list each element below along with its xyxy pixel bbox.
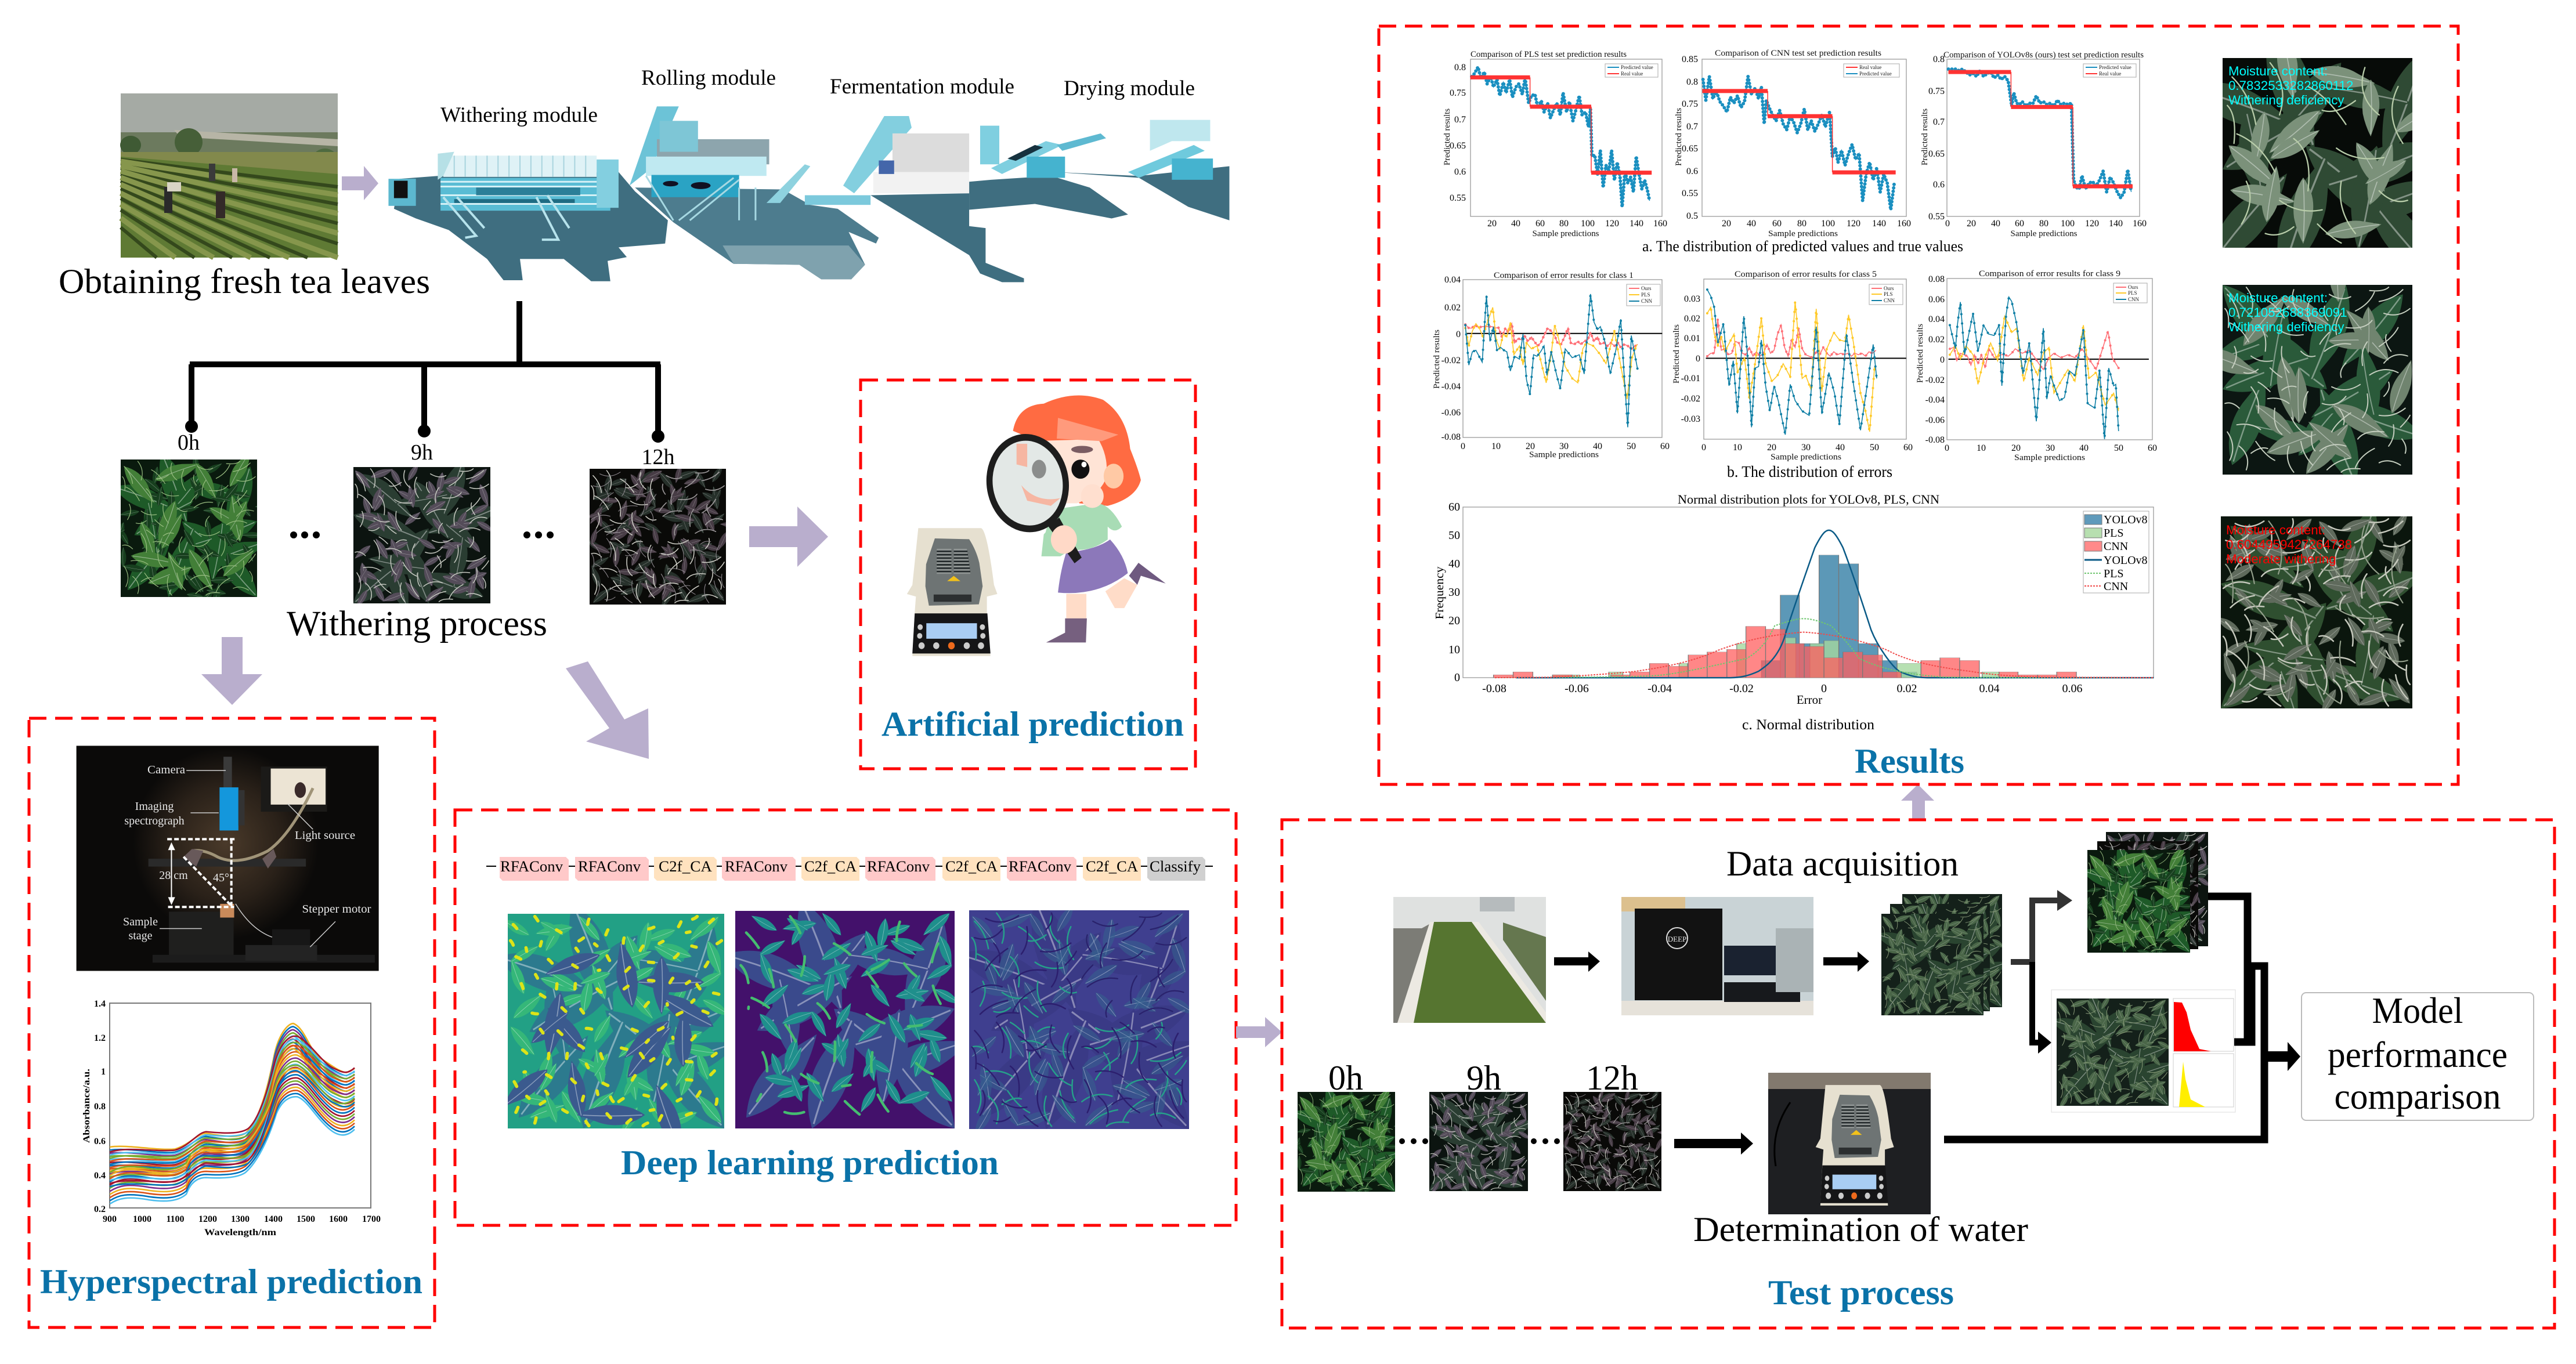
chart: normal distribution histogram: PLS xyxy=(2104,567,2123,580)
caption: withering process: Withering process xyxy=(287,605,547,643)
arrow xyxy=(1554,951,1600,972)
chart: errors class 1: 0.04 xyxy=(1444,275,1461,285)
chart: errors class 9: 0.08 xyxy=(1928,274,1945,284)
chart: errors class 1: CNN xyxy=(1641,298,1653,304)
chart: YOLOv8s predictions: Real value xyxy=(2099,71,2121,77)
chart: YOLOv8s predictions: 0.6 xyxy=(1933,180,1945,190)
chart: normal distribution histogram: 60 xyxy=(1448,501,1460,513)
caption: obtaining fresh tea leaves: Obtaining fresh tea leaves xyxy=(59,262,430,301)
chart: PLS predictions: 20 xyxy=(1487,219,1497,229)
arrow: to model comparison xyxy=(2264,1042,2300,1071)
chart: normal distribution histogram: -0.02 xyxy=(1729,682,1754,695)
chart: normal distribution histogram: Frequency xyxy=(1433,566,1446,620)
chart: normal distribution histogram: 40 xyxy=(1448,558,1460,570)
network block chain: RFAConv xyxy=(867,858,930,875)
chart: absorbance spectra: Absorbance/a.u. xyxy=(82,1069,92,1143)
chart: normal distribution histogram: 10 xyxy=(1448,643,1460,656)
chart: errors class 9: 50 xyxy=(2114,443,2123,453)
caption c: c. Normal distribution xyxy=(1742,717,1875,733)
chart: absorbance spectra: 0.2 xyxy=(94,1204,106,1214)
chart: errors class 1: 30 xyxy=(1559,442,1569,451)
image: 12h xyxy=(1547,1068,1680,1203)
chart: CNN predictions: 60 xyxy=(1772,219,1782,229)
label: 12h: 12h xyxy=(1586,1059,1638,1097)
chart: PLS predictions: 0.65 xyxy=(1450,141,1466,151)
chart: absorbance spectra: 1300 xyxy=(231,1214,250,1224)
image stack: raw leaves xyxy=(1874,885,2011,1021)
panel: artificial prediction xyxy=(861,380,1195,769)
chart: errors class 9: 40 xyxy=(2079,443,2089,453)
chart: errors class 9: PLS xyxy=(2128,290,2137,296)
chart: YOLOv8s predictions: Predicted value xyxy=(2099,64,2131,70)
chart: absorbance spectra: 1000 xyxy=(133,1214,151,1224)
chart: PLS predictions: 0.6 xyxy=(1454,167,1466,177)
chart: absorbance spectra: 0.4 xyxy=(94,1171,106,1181)
arrow head: gray xyxy=(2057,890,2072,911)
chart: CNN predictions: 160 xyxy=(1897,219,1911,229)
connectors to model comparison xyxy=(1944,896,2264,1139)
arrow: test process to results xyxy=(1901,784,1934,820)
result image 1: Moisture content: xyxy=(2228,64,2328,78)
chart: absorbance spectra: 1600 xyxy=(329,1214,348,1224)
chart: absorbance spectra: 0.6 xyxy=(94,1137,106,1146)
chart: PLS predictions: Sample predictions xyxy=(1532,229,1599,238)
chart: CNN predictions: 0.55 xyxy=(1682,189,1698,198)
panel: hyperspectral prediction xyxy=(29,718,435,1327)
chart: errors class 1: Predicted results xyxy=(1432,330,1441,389)
chart: CNN predictions: 0.75 xyxy=(1682,99,1698,109)
feature map 2 xyxy=(719,894,976,1139)
photo: hyperspectral imaging system: Imaging xyxy=(135,800,174,813)
chart: YOLOv8s predictions: 0 xyxy=(1945,219,1950,229)
chart: errors class 5: Ours xyxy=(1884,285,1894,291)
chart: errors class 1: Comparison of error results for class 1 xyxy=(1494,271,1634,280)
chart: CNN predictions: 0.65 xyxy=(1682,144,1698,154)
chart: errors class 1: -0.06 xyxy=(1441,408,1461,418)
chart: CNN predictions: 0.5 xyxy=(1686,211,1698,221)
chart: CNN predictions: 0.6 xyxy=(1686,167,1698,176)
title: hyperspectral prediction: Hyperspectral prediction xyxy=(40,1262,422,1301)
result image 2: Withering deficiency xyxy=(2228,320,2344,334)
chart: errors class 9: 0.06 xyxy=(1928,295,1945,305)
chart: normal distribution histogram: Normal distribution plots for YOLOv8, PLS, CNN xyxy=(1678,492,1939,506)
chart: CNN predictions: 0.85 xyxy=(1682,55,1698,64)
chart: absorbance spectra: 900 xyxy=(103,1214,117,1224)
chart: CNN predictions: Comparison of CNN test set prediction results xyxy=(1715,49,1881,58)
chart: YOLOv8s predictions: 100 xyxy=(2061,219,2075,229)
arrow: deep learning to test process xyxy=(1236,1017,1282,1047)
image: 9h leaves xyxy=(347,457,501,616)
result image 2 xyxy=(2178,236,2447,507)
icon: girl with magnifying glass xyxy=(980,396,1166,642)
chart: YOLOv8s predictions: 20 xyxy=(1967,219,1976,229)
chart: errors class 1: -0.08 xyxy=(1441,432,1461,442)
chart: PLS predictions xyxy=(1443,50,1667,238)
chart: absorbance spectra xyxy=(82,999,381,1238)
chart: absorbance spectra: 1400 xyxy=(264,1214,283,1224)
chart: YOLOv8s predictions: 0.8 xyxy=(1933,55,1945,64)
chart: YOLOv8s predictions: Predicted results xyxy=(1920,108,1930,165)
chart: errors class 5: 30 xyxy=(1801,443,1811,453)
chart: errors class 5: 20 xyxy=(1767,443,1776,453)
chart: errors class 1: 0 xyxy=(1461,442,1465,451)
chart: YOLOv8s predictions: 60 xyxy=(2015,219,2024,229)
chart: errors class 9: Predicted results xyxy=(1916,324,1925,383)
network block chain: RFAConv xyxy=(725,858,787,875)
panel: deep learning prediction xyxy=(455,810,1236,1225)
chart: errors class 9: -0.02 xyxy=(1925,375,1945,385)
chart: PLS predictions: 160 xyxy=(1653,219,1667,229)
box: model performance comparison: comparison xyxy=(2334,1076,2501,1117)
chart: errors class 1 xyxy=(1432,271,1670,460)
chart: errors class 5: 40 xyxy=(1836,443,1845,453)
chart: errors class 9: 0.02 xyxy=(1928,335,1945,345)
network block chain: RFAConv xyxy=(500,858,563,875)
chart: YOLOv8s predictions: Comparison of YOLOv8s (ours) test set prediction results xyxy=(1943,50,2144,60)
chart: errors class 5: CNN xyxy=(1884,298,1895,303)
photo: hyperspectral imaging system: Sample xyxy=(123,916,158,928)
arrow xyxy=(1823,951,1869,972)
chart: CNN predictions: Predicted results xyxy=(1674,108,1683,166)
result image 1 xyxy=(2181,8,2459,288)
result image 2: Moisture content: xyxy=(2228,291,2328,305)
chart: errors class 9: -0.08 xyxy=(1925,435,1945,445)
factory production line xyxy=(388,106,1229,282)
chart: normal distribution histogram: 0.04 xyxy=(1979,682,2000,695)
chart: errors class 1: 20 xyxy=(1526,442,1535,451)
chart: errors class 5: 60 xyxy=(1903,443,1913,453)
chart: errors class 9: Ours xyxy=(2128,284,2138,290)
chart: errors class 1: 60 xyxy=(1660,442,1670,451)
chart: YOLOv8s predictions: 40 xyxy=(1991,219,2000,229)
chart: PLS predictions: 140 xyxy=(1630,219,1643,229)
chart: errors class 9: -0.04 xyxy=(1925,395,1945,405)
chart: CNN predictions: 120 xyxy=(1847,219,1860,229)
arrow head: black xyxy=(2038,1032,2051,1054)
network block chain: C2f_CA xyxy=(804,858,857,875)
image: 12h leaves xyxy=(567,436,752,621)
chart: YOLOv8s predictions: 160 xyxy=(2133,219,2147,229)
chart: normal distribution histogram: CNN xyxy=(2104,540,2128,553)
photo: hyperspectral imaging system: Light source xyxy=(295,829,355,842)
chart: errors class 1: -0.02 xyxy=(1441,356,1461,366)
network block chain xyxy=(486,857,1213,881)
title: deep learning prediction: Deep learning prediction xyxy=(621,1144,999,1182)
caption a: a. The distribution of predicted values and true values xyxy=(1642,238,1963,255)
label: fermentation module: Fermentation module xyxy=(830,75,1014,99)
box: model performance comparison: performance xyxy=(2328,1034,2508,1075)
chart: CNN predictions: 40 xyxy=(1747,219,1756,229)
chart: errors class 1: 40 xyxy=(1593,442,1602,451)
ellipsis dots xyxy=(290,531,554,538)
photo: imaging setup with laptop xyxy=(1621,897,1813,1015)
chart: errors class 9: 10 xyxy=(1977,443,1986,453)
chart: errors class 9: 20 xyxy=(2011,443,2021,453)
chart: errors class 9: -0.06 xyxy=(1925,415,1945,425)
chart: CNN predictions: 20 xyxy=(1722,219,1731,229)
network block chain: Classify xyxy=(1150,858,1201,875)
photo: hyperspectral imaging system: Stepper motor xyxy=(302,903,371,916)
chart: errors class 5: 0.01 xyxy=(1684,334,1700,343)
chart: normal distribution histogram: PLS xyxy=(2104,527,2123,540)
chart: normal distribution histogram: 0 xyxy=(1821,682,1827,695)
chart: PLS predictions: 40 xyxy=(1511,219,1520,229)
chart: normal distribution histogram: 0 xyxy=(1454,671,1460,684)
connector: raw to histogram xyxy=(2032,962,2043,1043)
chart: errors class 9: 0 xyxy=(1940,355,1945,365)
image stack: processed leaves xyxy=(2066,816,2217,977)
chart: normal distribution histogram: 50 xyxy=(1448,529,1460,542)
chart: normal distribution histogram: 0.06 xyxy=(2062,682,2082,695)
chart: errors class 5: Predicted results xyxy=(1672,324,1681,383)
chart: normal distribution histogram: 30 xyxy=(1448,586,1460,599)
label: 12h: 12h xyxy=(642,445,674,469)
network block chain: C2f_CA xyxy=(945,858,998,875)
chart: errors class 5: Comparison of error results for class 5 xyxy=(1735,270,1877,279)
result image 3: Moderate withering xyxy=(2226,552,2336,566)
chart: errors class 5: 0.02 xyxy=(1684,314,1700,324)
chart: normal distribution histogram: 20 xyxy=(1448,614,1460,627)
heading: data acquisition: Data acquisition xyxy=(1726,845,1959,884)
chart: errors class 5: -0.01 xyxy=(1681,374,1700,383)
chart: YOLOv8s predictions: 80 xyxy=(2039,219,2048,229)
arrow: field to factory xyxy=(342,166,378,200)
chart: errors class 9: Sample predictions xyxy=(2014,453,2085,462)
chart: normal distribution histogram: -0.04 xyxy=(1648,682,1672,695)
chart: errors class 5: PLS xyxy=(1884,291,1893,297)
result image 1: Withering deficiency xyxy=(2228,93,2344,107)
photo: hyperspectral imaging system: stage xyxy=(128,929,153,942)
network block chain: C2f_CA xyxy=(659,858,712,875)
chart: YOLOv8s predictions: 0.75 xyxy=(1928,86,1945,96)
chart: errors class 5: 0.03 xyxy=(1684,294,1700,304)
chart: absorbance spectra: Wavelength/nm xyxy=(204,1228,277,1238)
label: 9h: 9h xyxy=(411,440,433,465)
chart: YOLOv8s predictions: 0.7 xyxy=(1933,117,1945,127)
chart: normal distribution histogram xyxy=(1433,492,2154,707)
chart: errors class 1: Sample predictions xyxy=(1529,450,1599,460)
image: 0h leaves xyxy=(92,429,290,630)
histogram window xyxy=(2048,990,2235,1112)
chart: PLS predictions: 60 xyxy=(1536,219,1545,229)
chart: PLS predictions: 0.7 xyxy=(1454,115,1466,125)
result image 3: Moisture content: xyxy=(2226,523,2325,537)
chart: errors class 5: -0.02 xyxy=(1681,394,1700,404)
chart: errors class 9: 0 xyxy=(1945,443,1949,453)
network block chain: RFAConv xyxy=(578,858,641,875)
chart: errors class 9: 30 xyxy=(2046,443,2055,453)
chart: normal distribution histogram: CNN xyxy=(2104,580,2128,593)
chart: errors class 1: Ours xyxy=(1641,285,1652,291)
chart: errors class 5 xyxy=(1672,270,1913,462)
chart: CNN predictions: Real value xyxy=(1859,64,1881,70)
chart: CNN predictions: 0.8 xyxy=(1686,77,1698,87)
chart: PLS predictions: Comparison of PLS test set prediction results xyxy=(1471,50,1627,59)
label: 9h: 9h xyxy=(1466,1059,1501,1097)
chart: absorbance spectra: 1.2 xyxy=(94,1033,106,1043)
tree connector xyxy=(188,301,662,440)
chart: errors class 1: 0.02 xyxy=(1444,303,1461,313)
label: rolling module: Rolling module xyxy=(641,66,776,90)
chart: CNN predictions: 0.7 xyxy=(1686,122,1698,132)
network block chain: RFAConv xyxy=(1009,858,1071,875)
photo: hyperspectral imaging system: 45° xyxy=(213,871,229,884)
chart: errors class 5: 0 xyxy=(1696,354,1700,364)
label: 0h: 0h xyxy=(1328,1059,1363,1097)
title: results: Results xyxy=(1855,742,1964,780)
title: test process: Test process xyxy=(1768,1273,1954,1312)
label: 0h: 0h xyxy=(178,430,200,455)
chart: errors class 5: Sample predictions xyxy=(1771,453,1841,462)
result image 2: 0.721052688369091 xyxy=(2228,305,2347,320)
chart: PLS predictions: Real value xyxy=(1621,71,1643,77)
box: model performance comparison xyxy=(2302,990,2534,1120)
chart: errors class 5: 10 xyxy=(1733,443,1742,453)
chart: PLS predictions: 80 xyxy=(1559,219,1569,229)
title: artificial prediction: Artificial prediction xyxy=(881,705,1184,743)
chart: errors class 5: 50 xyxy=(1870,443,1879,453)
chart: errors class 9 xyxy=(1916,269,2157,462)
chart: YOLOv8s predictions xyxy=(1920,50,2147,238)
photo: withering trough xyxy=(1393,897,1546,1023)
chart: PLS predictions: 0.75 xyxy=(1450,88,1466,98)
chart: YOLOv8s predictions: 120 xyxy=(2085,219,2099,229)
chart: errors class 5: 0 xyxy=(1701,443,1706,453)
arrow: to deep learning prediction xyxy=(566,661,649,759)
chart: errors class 1: PLS xyxy=(1641,292,1650,298)
ellipsis dots xyxy=(1399,1138,1560,1144)
chart: errors class 1: -0.04 xyxy=(1441,382,1461,392)
chart: absorbance spectra: 1700 xyxy=(362,1214,381,1224)
chart: errors class 9: CNN xyxy=(2128,296,2140,302)
chart: absorbance spectra: 1.4 xyxy=(94,999,106,1009)
chart: PLS predictions: 0.8 xyxy=(1454,63,1466,73)
label: withering module: Withering module xyxy=(440,103,598,127)
chart: errors class 1: 10 xyxy=(1491,442,1501,451)
photo: hyperspectral imaging system: spectrograph xyxy=(124,815,185,827)
chart: errors class 9: Comparison of error results for class 9 xyxy=(1979,269,2120,278)
chart: errors class 1: 50 xyxy=(1627,442,1636,451)
chart: errors class 1: 0 xyxy=(1456,330,1461,339)
result image 3 xyxy=(2212,502,2427,727)
photo: imaging setup with laptop: DEEP xyxy=(1668,935,1686,943)
chart: CNN predictions: Predicted value xyxy=(1859,71,1892,77)
panel: results xyxy=(1379,8,2459,784)
chart: CNN predictions: Sample predictions xyxy=(1768,229,1838,238)
chart: errors class 5: -0.03 xyxy=(1681,414,1700,424)
chart: normal distribution histogram: -0.06 xyxy=(1565,682,1589,695)
connector: raw to segmented xyxy=(2011,900,2057,962)
chart: PLS predictions: 0.55 xyxy=(1450,193,1466,203)
caption: determination of water: Determination of water xyxy=(1693,1210,2028,1249)
chart: errors class 9: 60 xyxy=(2148,443,2157,453)
label: drying module: Drying module xyxy=(1064,77,1195,100)
arrow: to hyperspectral prediction xyxy=(201,637,262,705)
chart: YOLOv8s predictions: 0.65 xyxy=(1928,149,1945,159)
photo: hyperspectral imaging system: 28 cm xyxy=(159,869,188,882)
chart: PLS predictions: 120 xyxy=(1605,219,1619,229)
chart: YOLOv8s predictions: 0.55 xyxy=(1928,212,1945,222)
photo: hyperspectral imaging system: Camera xyxy=(147,764,185,776)
chart: normal distribution histogram: 0.02 xyxy=(1896,682,1917,695)
photo: moisture analyser xyxy=(1768,1073,1931,1214)
chart: absorbance spectra: 1500 xyxy=(297,1214,315,1224)
icon: moisture analyser xyxy=(907,528,998,656)
chart: PLS predictions: Predicted value xyxy=(1621,64,1653,70)
arrow: to artificial prediction xyxy=(749,506,828,567)
chart: YOLOv8s predictions: Sample predictions xyxy=(2010,229,2078,238)
chart: normal distribution histogram: Error xyxy=(1797,693,1822,707)
caption b: b. The distribution of errors xyxy=(1727,463,1892,480)
feature map 1 xyxy=(490,897,749,1175)
chart: PLS predictions: Predicted results xyxy=(1443,108,1452,165)
box: model performance comparison: Model xyxy=(2372,990,2463,1031)
arrow xyxy=(1674,1133,1753,1155)
chart: normal distribution histogram: YOLOv8 xyxy=(2104,513,2148,526)
chart: absorbance spectra: 1200 xyxy=(198,1214,217,1224)
chart: CNN predictions: 80 xyxy=(1797,219,1807,229)
image: 0h xyxy=(1277,1070,1418,1215)
chart: errors class 9: 0.04 xyxy=(1928,314,1945,324)
chart: PLS predictions: 100 xyxy=(1581,219,1595,229)
result image 1: 0.7832533282860112 xyxy=(2228,78,2353,93)
chart: normal distribution histogram: YOLOv8 xyxy=(2104,554,2148,567)
photo: hyperspectral imaging system xyxy=(77,746,379,971)
image: 9h xyxy=(1425,1084,1536,1200)
panel: test process xyxy=(1277,816,2555,1328)
chart: CNN predictions: 140 xyxy=(1872,219,1886,229)
chart: absorbance spectra: 1100 xyxy=(166,1214,185,1224)
chart: YOLOv8s predictions: 140 xyxy=(2109,219,2123,229)
chart: absorbance spectra: 1 xyxy=(101,1067,106,1077)
network block chain: C2f_CA xyxy=(1086,858,1138,875)
chart: CNN predictions xyxy=(1674,49,1911,238)
chart: CNN predictions: 100 xyxy=(1821,219,1835,229)
chart: absorbance spectra: 0.8 xyxy=(94,1102,106,1112)
result image 3: 0.6044959427264738 xyxy=(2226,537,2352,552)
photo: tea plantation xyxy=(120,93,338,258)
chart: normal distribution histogram: -0.08 xyxy=(1482,682,1506,695)
feature map 3 xyxy=(953,893,1210,1139)
